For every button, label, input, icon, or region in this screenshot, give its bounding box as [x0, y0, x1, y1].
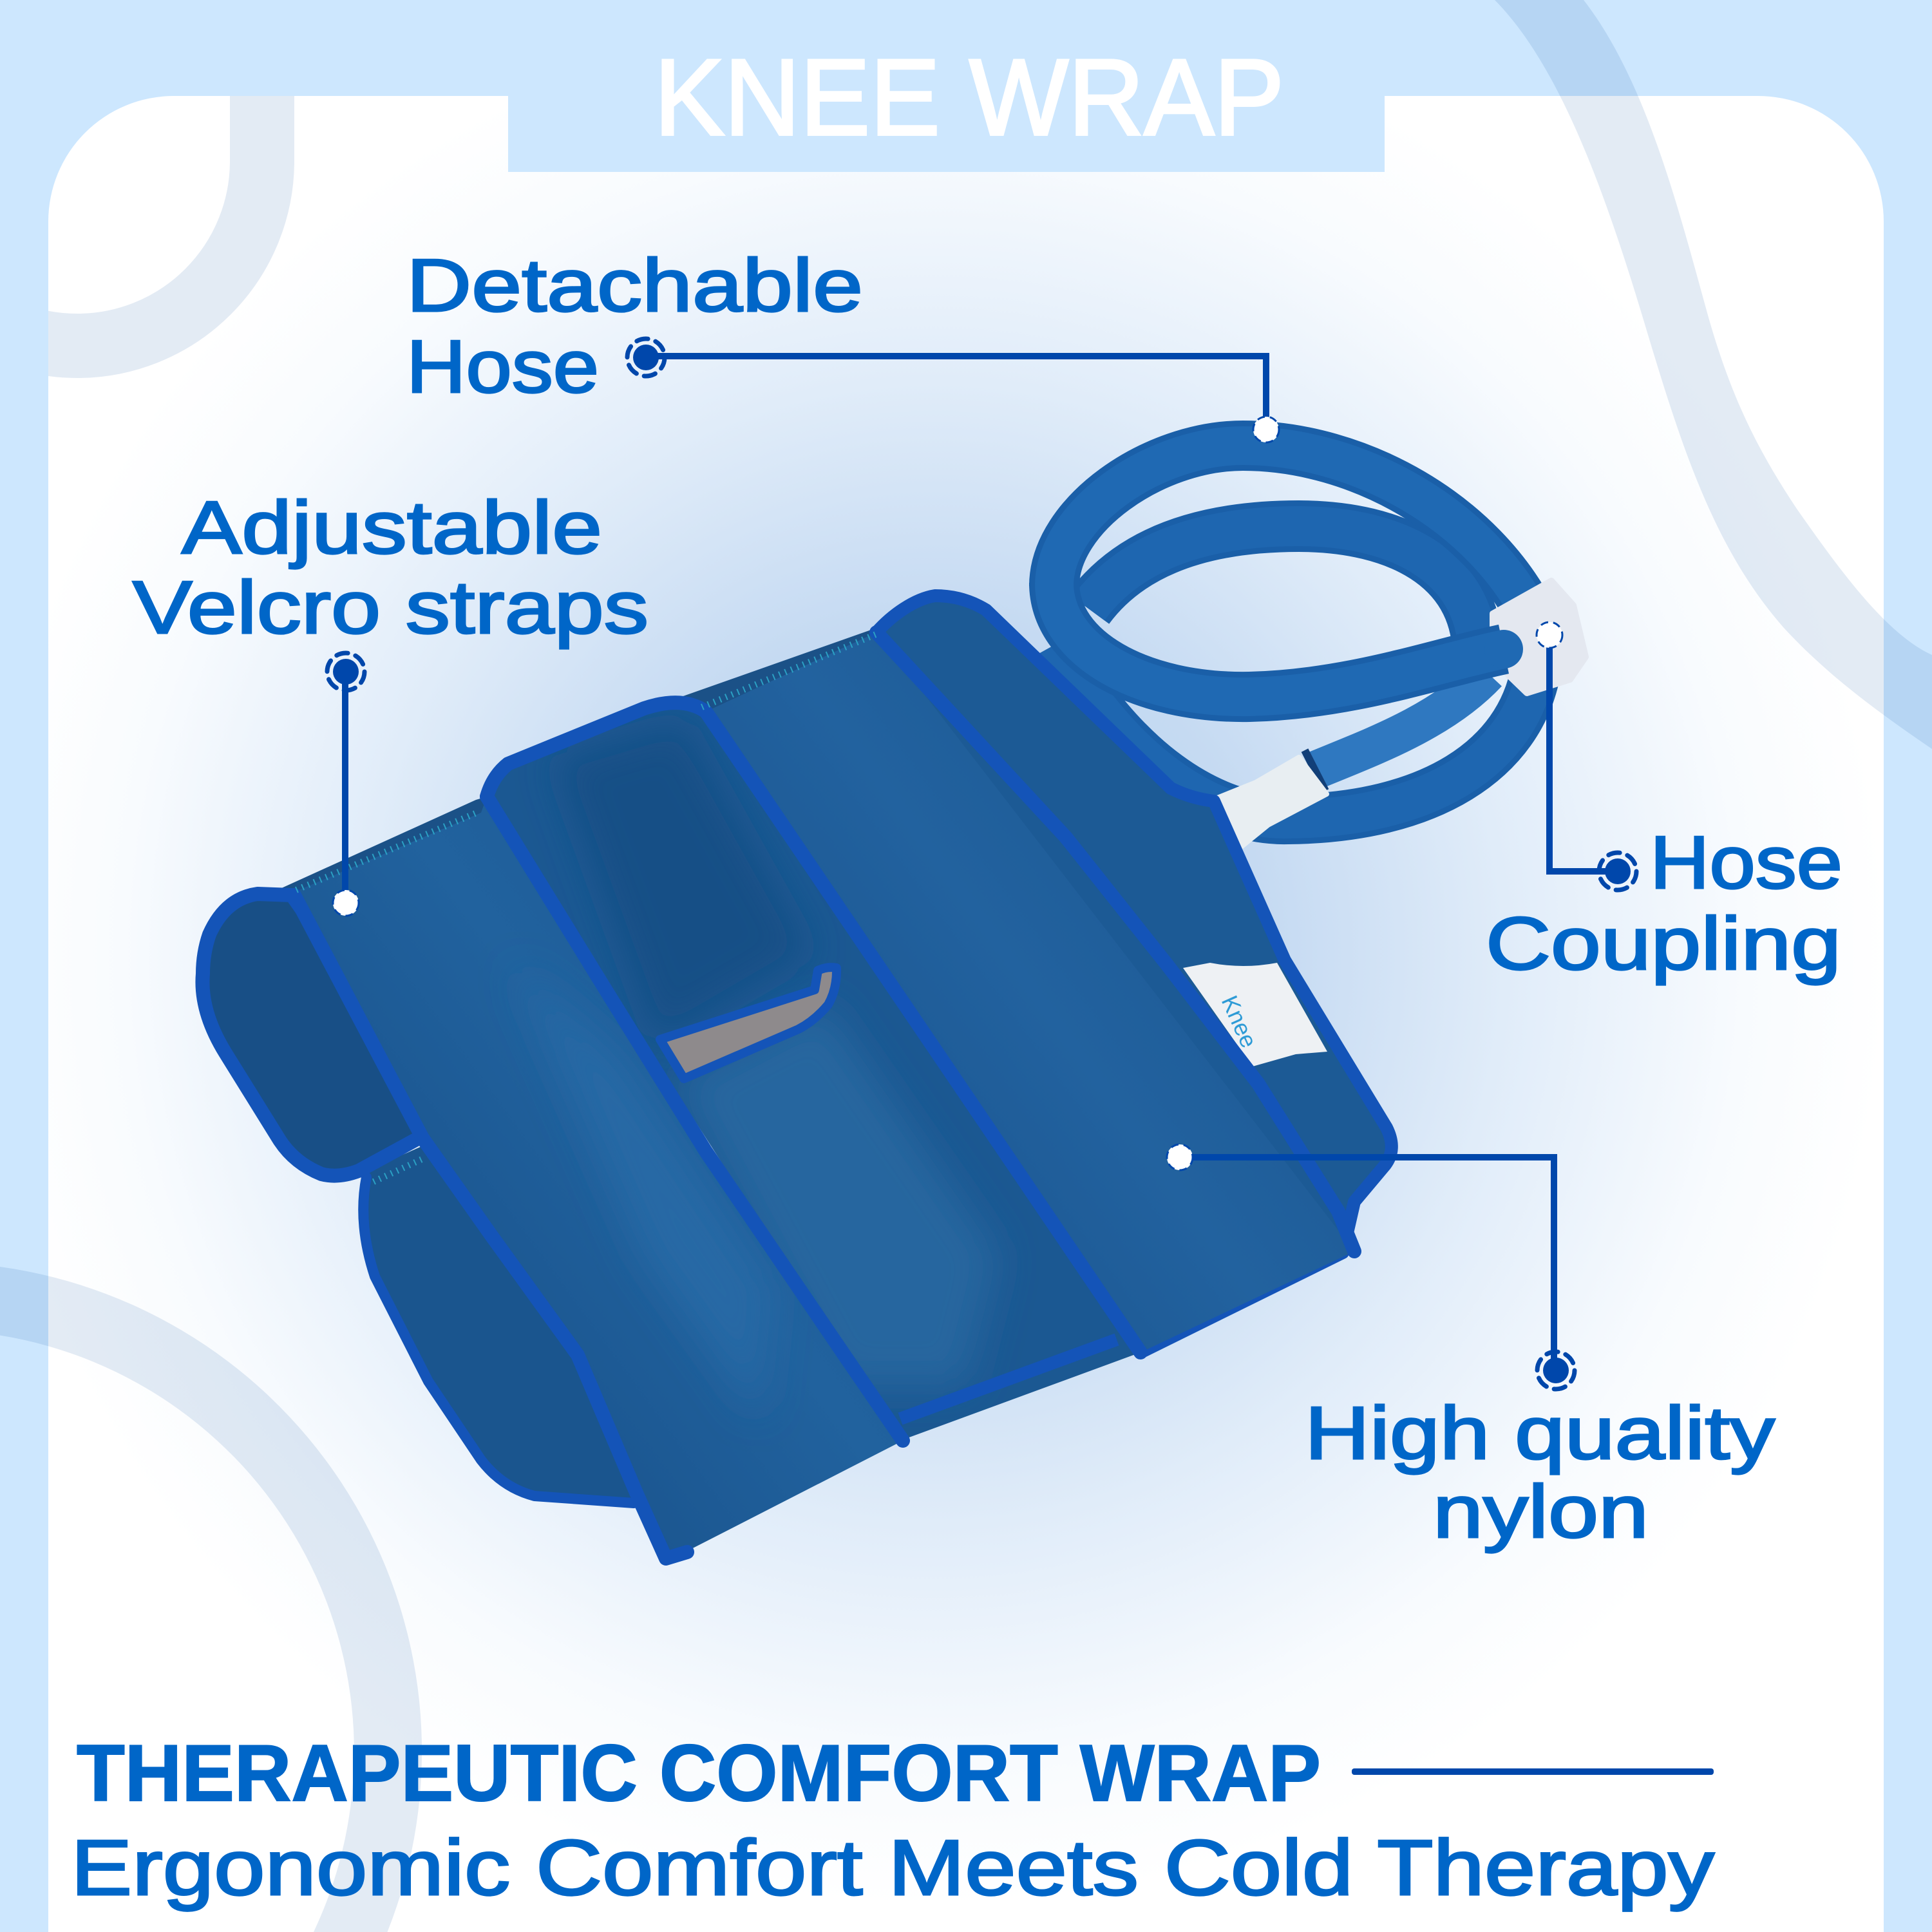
callout: Hose Coupling [1537, 622, 1636, 890]
left upper flap [202, 894, 451, 1176]
stitching [296, 634, 876, 1182]
right strap trim [487, 703, 1141, 1352]
knee slot [660, 967, 837, 1079]
label: High quality nylon: High quality [1305, 1391, 1775, 1475]
label: High quality nylon [1305, 1391, 1775, 1553]
coupling nut [1493, 581, 1586, 693]
callout: Detachable Hose [627, 339, 1279, 442]
label: Hose Coupling [1486, 820, 1842, 985]
callout: Velcro straps [327, 653, 365, 916]
label: Hose Coupling: Coupling [1486, 902, 1841, 985]
label: Adjustable Velcro straps: Velcro straps [133, 565, 649, 649]
label text: Knee [1217, 992, 1262, 1052]
label: Adjustable Velcro straps [133, 486, 649, 649]
label: High quality nylon: nylon [1433, 1470, 1649, 1553]
callout: High quality nylon [1167, 1144, 1575, 1389]
left lower flap [363, 1133, 708, 1503]
decorative ring: top left [0, 64, 262, 346]
top stitched strip [273, 628, 895, 902]
pocket bottom trim [900, 1340, 1117, 1419]
lower flap trim [363, 1177, 634, 1503]
product: knee wrap with hose [202, 446, 1586, 1558]
left strap trim [294, 895, 687, 1558]
decorative band: top right [1495, 0, 1932, 749]
right back panel [876, 596, 1392, 1352]
heading rule [1352, 1768, 1714, 1775]
label: Adjustable Velcro straps: Adjustable [182, 486, 602, 569]
right strap [487, 632, 1354, 1352]
decorative ring: bottom left [0, 1267, 422, 1932]
heading: Therapeutic Comfort Wrap: THERAPEUTIC COMFORT WRAP [77, 1729, 1321, 1818]
title tab [508, 37, 1385, 172]
title: KNEE WRAP [654, 37, 1284, 158]
care label [1183, 963, 1327, 1066]
left strap [294, 797, 903, 1558]
subheading: Ergonomic Comfort Meets Cold Therapy [71, 1824, 1714, 1911]
label: Detachable Hose: Detachable [406, 243, 863, 327]
hose tubing behind coupling [1054, 446, 1536, 819]
hose connector [1206, 757, 1327, 850]
middle pocket [487, 701, 1141, 1441]
label: Detachable Hose: Hose [406, 325, 599, 408]
label: Hose Coupling: Hose [1650, 820, 1842, 904]
hose front tube [1054, 583, 1523, 697]
label: Detachable Hose [406, 243, 863, 408]
